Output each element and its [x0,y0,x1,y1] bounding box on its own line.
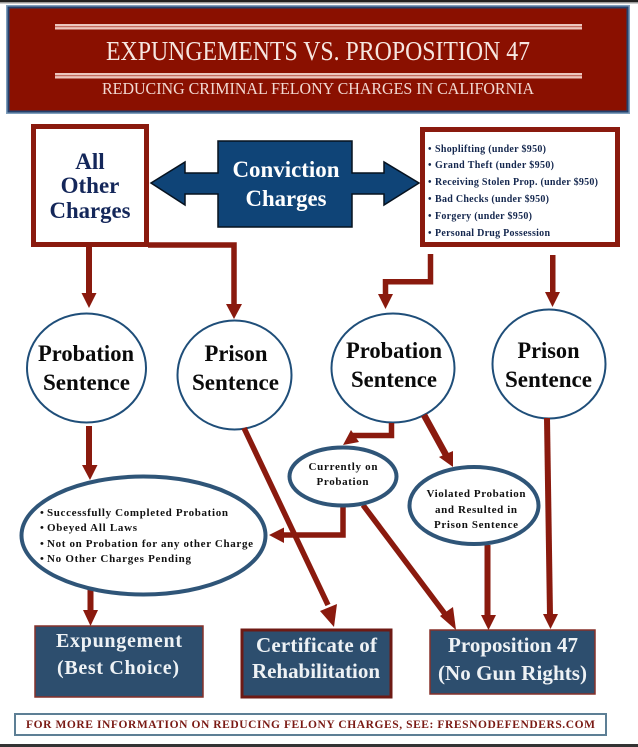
box: certificate of rehabilitation [242,630,391,697]
arrow: currently on probation to requirements [269,506,343,543]
arrow: list to probation [378,254,430,309]
box: proposition 47 charges list: Shoplifting (under $950) [435,144,546,155]
ellipse: currently on probation: Probation [316,476,368,488]
circle: prison sentence right: Sentence [505,367,592,392]
circle: probation sentence right: Sentence [351,367,437,392]
box: all other charges: Other [61,173,119,198]
ellipse: expungement requirements: Successfully Completed Probation [47,507,228,519]
arrow: list to prison [545,255,560,307]
box: all other charges [34,126,146,244]
box: proposition 47 [430,630,595,694]
box: all other charges: All [75,149,105,174]
circle: probation sentence right: Probation [346,338,442,363]
circle: probation sentence right [332,314,454,422]
double arrow: conviction charges: Conviction [232,157,340,182]
header banner [6,5,630,114]
arrow: probation to currently on probation [343,423,392,445]
box: certificate of rehabilitation: Rehabilitation [252,659,380,683]
circle: prison sentence left [178,320,292,430]
box: expungement: Expungement [56,630,182,652]
circle: probation sentence left [27,314,146,422]
ellipse: expungement requirements: • [40,507,44,519]
box: proposition 47: (No Gun Rights) [438,661,587,685]
ellipse: currently on probation [290,448,396,506]
ellipse: expungement requirements: Obeyed All Laws [47,522,138,534]
ellipse: expungement requirements: • [40,522,44,534]
arrow: prison to certificate of rehabilitation [244,428,337,627]
circle: prison sentence right: Prison [518,338,580,363]
ellipse: violated probation: Prison Sentence [434,519,518,531]
arrow: all other charges to probation [82,245,96,308]
ellipse: expungement requirements: No Other Charges Pending [47,553,192,565]
arrow: all other charges to prison [148,245,242,319]
ellipse: violated probation: Violated Probation [426,488,526,500]
circle: prison sentence left: Prison [204,341,268,366]
arrow: requirements to expungement [83,588,98,626]
box: proposition 47 charges list: • [428,194,432,205]
circle: probation sentence left: Probation [38,341,134,366]
ellipse: expungement requirements [22,476,266,594]
ellipse: violated probation [410,467,538,544]
box: all other charges: Charges [50,198,131,223]
box: expungement: (Best Choice) [57,657,179,679]
box: proposition 47 charges list: Forgery (under $950) [435,211,532,222]
box: proposition 47 charges list: • [428,228,432,239]
box: proposition 47 charges list: • [428,211,432,222]
circle: probation sentence left: Sentence [43,370,130,395]
ellipse: expungement requirements: Not on Probation for any other Charge [47,538,253,550]
box: proposition 47 charges list: • [428,160,432,171]
arrow: currently on probation to proposition 47 [363,505,456,630]
subtitle: REDUCING CRIMINAL FELONY CHARGES IN CALIFORNIA [102,79,534,98]
box: proposition 47 charges list [422,130,618,244]
circle: prison sentence right [492,310,606,418]
arrow: prison to proposition 47 [543,418,558,629]
arrow: probation to requirements [82,426,98,480]
footer callout [15,714,606,735]
box: certificate of rehabilitation: Certificate of [256,633,378,657]
footer callout: FOR MORE INFORMATION ON REDUCING FELONY CHARGES, SEE: FRESNODEFENDERS.COM [26,719,595,731]
ellipse: violated probation: and Resulted in [435,504,517,516]
arrow: probation to violated probation [424,415,453,467]
double arrow: conviction charges: Charges [246,186,327,211]
box: proposition 47 charges list: Bad Checks (under $950) [435,194,549,205]
ellipse: expungement requirements: • [40,553,44,565]
arrow: violated probation to proposition 47 [481,545,496,630]
box: proposition 47 charges list: Receiving Stolen Prop. (under $950) [435,177,598,188]
ellipse: expungement requirements: • [40,538,44,550]
box: expungement [35,626,203,697]
ellipse: currently on probation: Currently on [308,461,378,473]
box: proposition 47 charges list: • [428,177,432,188]
box: proposition 47 charges list: • [428,144,432,155]
box: proposition 47 charges list: Personal Drug Possession [435,228,550,239]
circle: prison sentence left: Sentence [192,370,279,395]
double arrow: conviction charges [151,141,419,227]
title: EXPUNGEMENTS VS. PROPOSITION 47 [106,36,530,66]
box: proposition 47 charges list: Grand Theft (under $950) [435,160,554,171]
box: proposition 47: Proposition 47 [448,633,578,657]
